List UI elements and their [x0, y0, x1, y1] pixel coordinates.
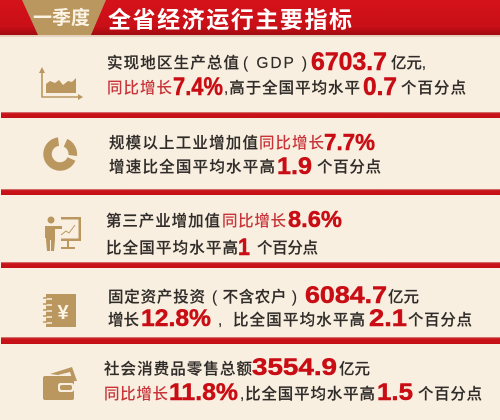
text: tertiary line 1: 同比增长 [222, 212, 286, 230]
text: retail line 1: 社会消费品零售总额 [104, 360, 252, 378]
text: GDP line 1: 亿元, [391, 54, 426, 72]
text: retail line 2: 1.5 [377, 379, 413, 406]
text: GDP line 2: ,高于全国平均水平 [224, 78, 360, 97]
icon: presenter with board [45, 216, 81, 251]
panel: fixed assets [43, 282, 472, 332]
text: tertiary line 2: 个百分点 [257, 239, 318, 257]
text: fixed assets line 1: 固定资产投资 [108, 287, 205, 306]
text: GDP line 2: 7.4% [173, 73, 223, 101]
text: industry line 1: 同比增长 [259, 134, 324, 152]
text: fixed assets line 2: 2.1 [369, 305, 407, 332]
text: fixed assets line 1 [108, 282, 419, 309]
icon: yuan notebook [43, 294, 76, 327]
panel: tertiary industry [45, 206, 342, 261]
text: industry line 2: 1.9 [277, 153, 312, 180]
text: GDP line 1: 6703.7 [311, 48, 387, 76]
text: fixed assets line 2: 12.8% [141, 305, 211, 332]
icon: area chart [39, 67, 83, 100]
text: GDP line 2: 0.7 [363, 73, 397, 101]
text: tertiary line 2: 比全国平均水平高 [106, 238, 238, 257]
text: industry line 1 [109, 129, 375, 155]
text: fixed assets line 2: 增长 [108, 311, 139, 329]
text: fixed assets line 2: 比全国平均水平高 [233, 310, 365, 329]
panel: retail [43, 354, 482, 406]
icon: donut chart [48, 142, 73, 167]
text: retail line 2 [104, 379, 482, 406]
panel: GDP [39, 48, 466, 101]
season badge: 一季度 [33, 6, 90, 29]
text: retail line 2: 个百分点 [418, 385, 482, 403]
text: tertiary line 2: 1 [238, 234, 250, 261]
text: tertiary line 1: 8.6% [288, 206, 342, 232]
text: GDP line 1: 实现地区生产总值 [107, 53, 239, 72]
text: retail line 2: ,比全国平均水平高 [240, 384, 375, 403]
text: retail line 2: 11.8% [169, 379, 238, 406]
text: industry line 2 [109, 153, 381, 180]
icon: yuan notebook: ¥ [57, 302, 69, 324]
text: retail line 1: 亿元 [339, 360, 370, 378]
text: GDP line 1: ( GDP ) [243, 55, 307, 72]
text: fixed assets line 1: ( 不含农户 ) [212, 288, 297, 306]
text: fixed assets line 2 [108, 305, 472, 332]
text: fixed assets line 1: 亿元 [388, 288, 419, 306]
text: GDP line 1 [107, 48, 426, 76]
text: retail line 2: 同比增长 [104, 385, 168, 403]
text: GDP line 2: 个百分点 [401, 79, 466, 97]
divider bars [1, 112, 500, 344]
text: tertiary line 1 [106, 206, 342, 232]
text: industry line 1: 规模以上工业增加值 [109, 134, 258, 152]
text: retail line 1 [104, 354, 370, 381]
text: fixed assets line 2: , [218, 312, 222, 329]
panel: industry [48, 129, 381, 180]
text: industry line 2: 增速比全国平均水平高 [109, 157, 275, 176]
text: industry line 2: 个百分点 [317, 158, 381, 176]
text: GDP line 2: 同比增长 [107, 79, 172, 97]
title: 全省经济运行主要指标 [108, 6, 352, 32]
text: industry line 1: 7.7% [324, 129, 375, 155]
icon: wallet [43, 367, 77, 400]
text: tertiary line 1: 第三产业增加值 [106, 212, 220, 230]
season badge [22, 0, 106, 35]
text: fixed assets line 1: 6084.7 [305, 282, 387, 309]
text: tertiary line 2 [106, 234, 318, 261]
text: fixed assets line 2: 个百分点 [408, 311, 472, 329]
text: GDP line 2 [107, 73, 466, 101]
header banner [0, 0, 500, 37]
text: retail line 1: 3554.9 [252, 354, 337, 381]
